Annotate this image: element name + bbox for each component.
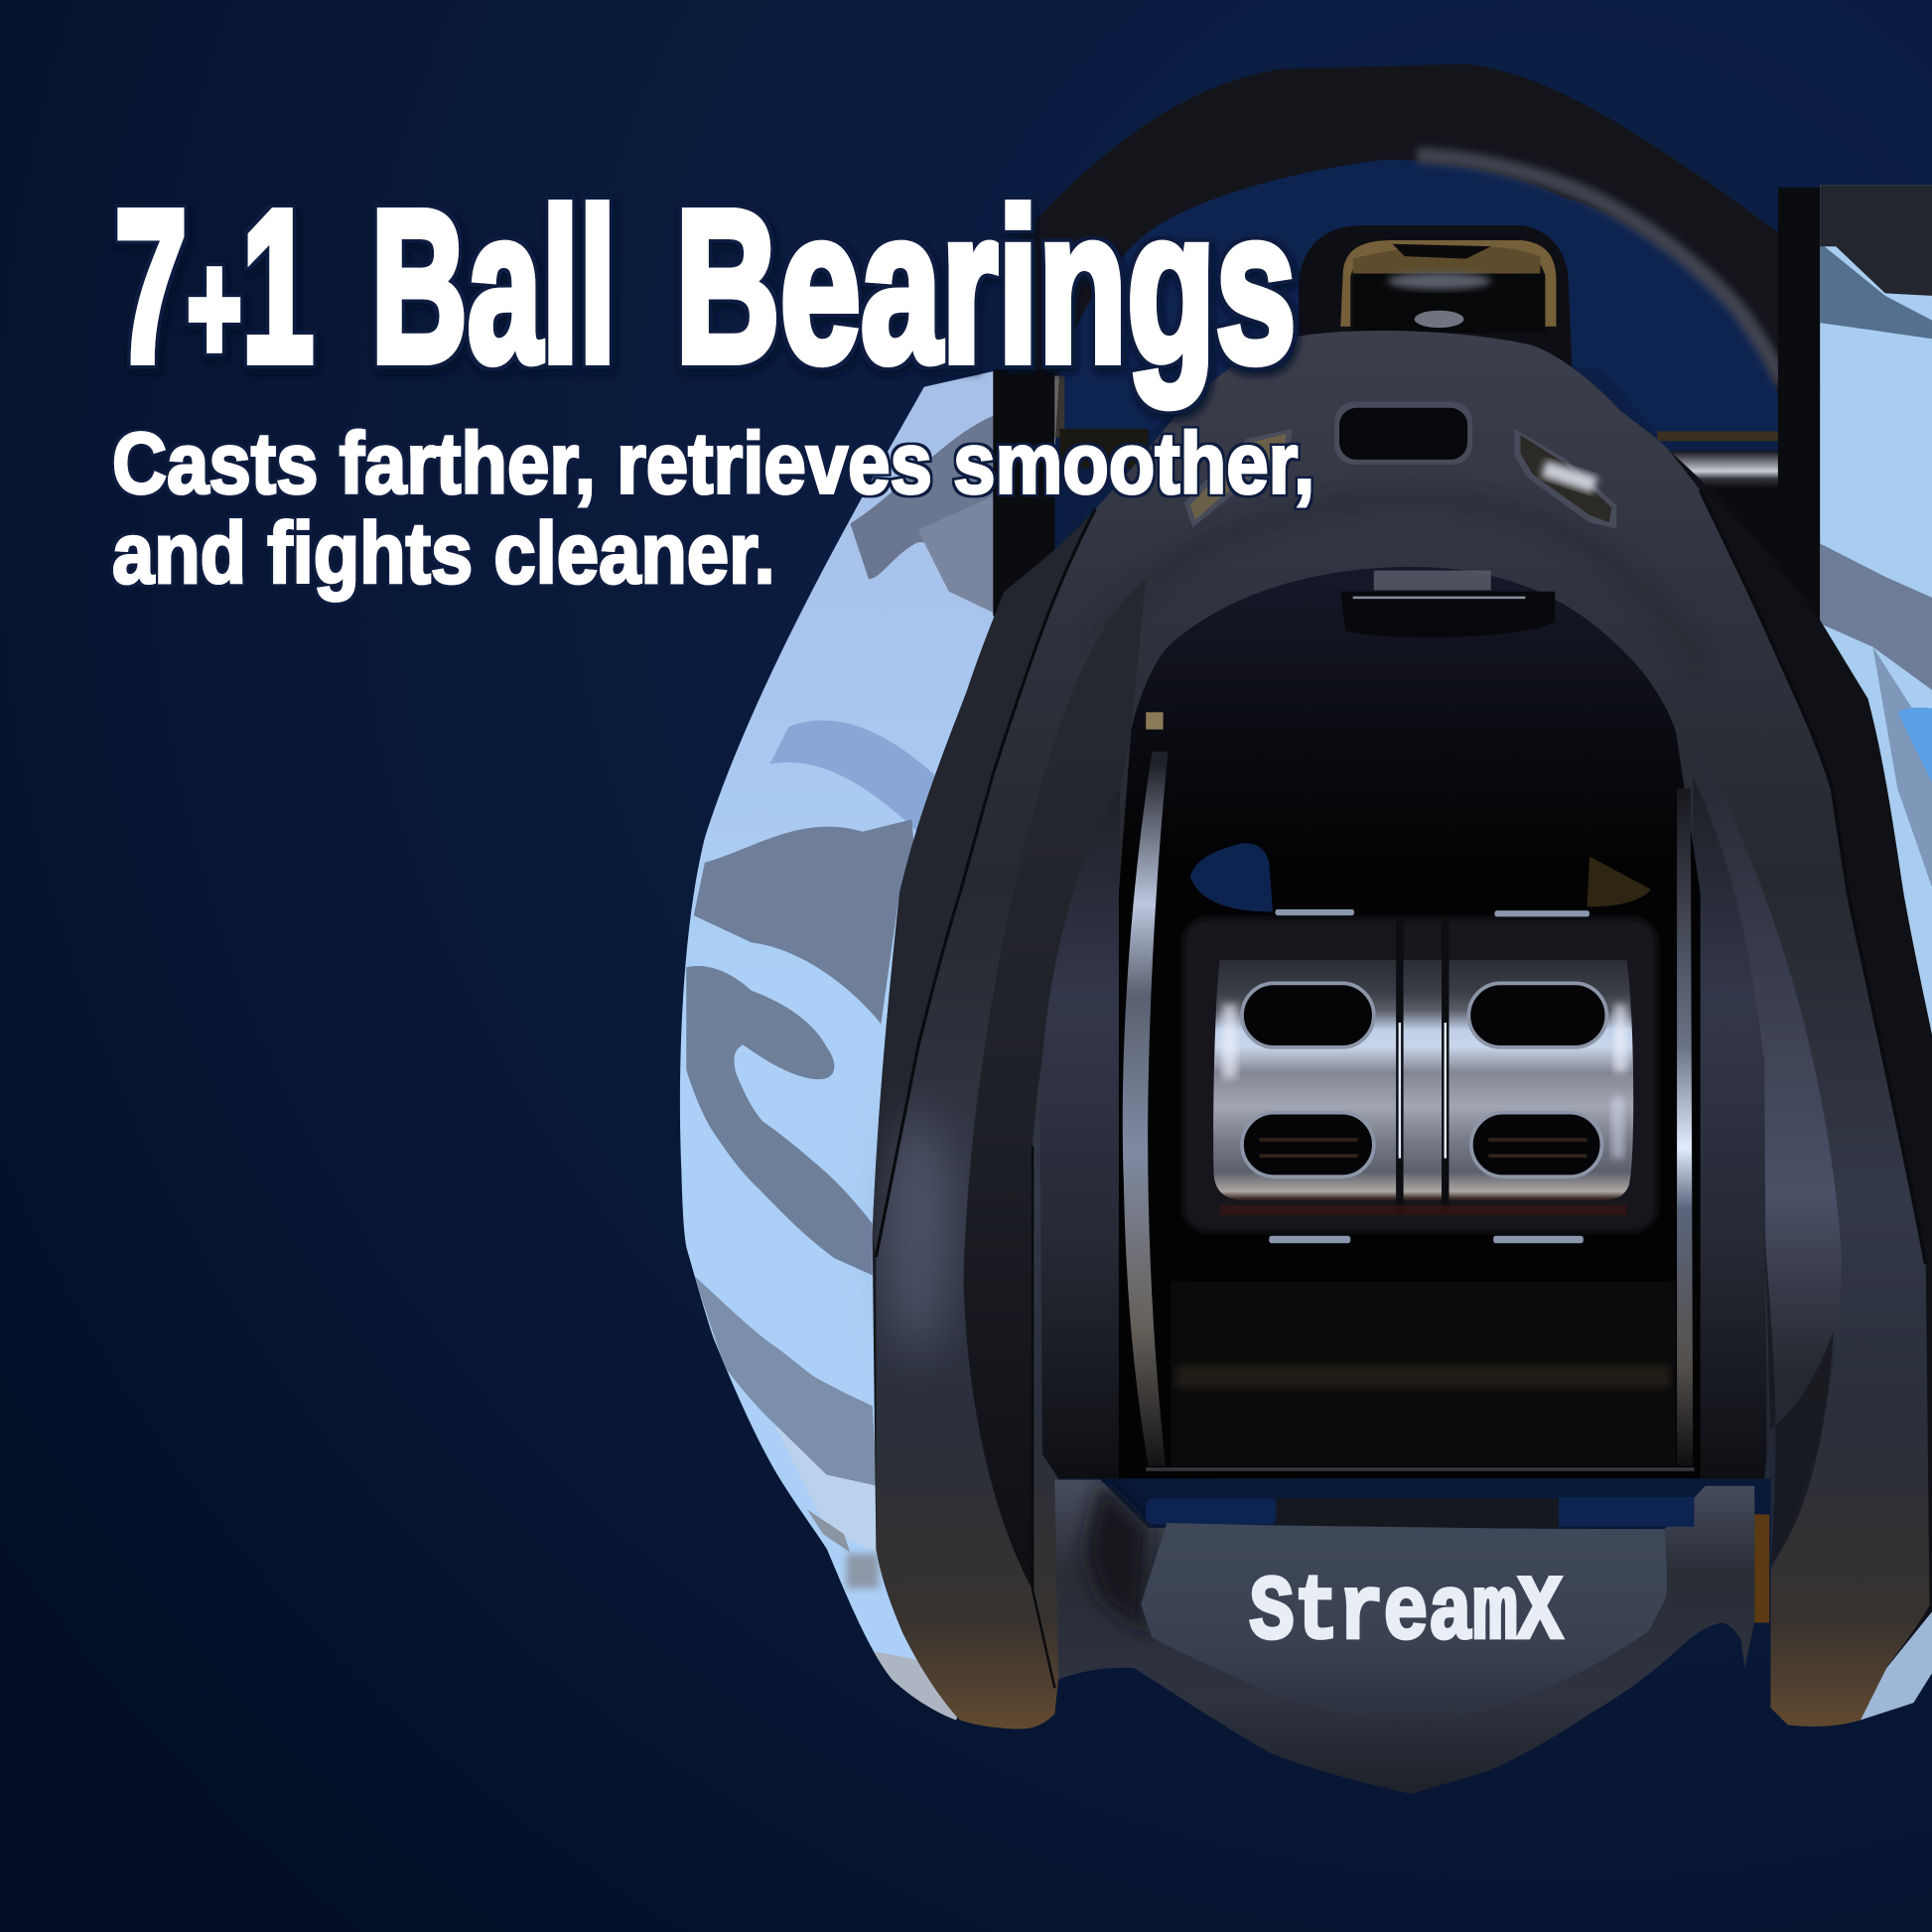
title: Ball: [371, 166, 617, 408]
left inner panel: [1039, 788, 1120, 1478]
body shell: [876, 331, 1930, 1729]
camo stripes, right plate: [1820, 185, 1932, 888]
right inner panel: [1693, 776, 1767, 1478]
icon: right spool flange: [1677, 788, 1693, 1466]
left outer panel highlight: [889, 1109, 947, 1355]
icon: right support post: [1778, 188, 1820, 628]
title: Bearings: [675, 166, 1297, 408]
grey logo plate: [1141, 1523, 1667, 1724]
right outer panel edge: [1693, 740, 1842, 1571]
frame shading near opening: [1095, 499, 1701, 665]
top windows of frame: [1184, 402, 1616, 528]
icon: polished spool cylinder: [1213, 918, 1633, 1213]
panel: base plate with logo: [1054, 1480, 1769, 1794]
text block: subtitle: [112, 415, 1314, 602]
panel: right camo side plate: [1820, 185, 1932, 1047]
icon: left support post: [993, 369, 1149, 617]
navy slots above plate: [1146, 1497, 1694, 1528]
icon: copper spacer: [1754, 1514, 1769, 1622]
panel: main reel frame: [873, 331, 1932, 1729]
seam lines: [876, 509, 1095, 1257]
slot reflections: [1259, 1140, 1587, 1156]
slots: [1242, 983, 1606, 1176]
icon: top knob: [1299, 225, 1574, 407]
title: [114, 166, 1297, 408]
text block: subtitle: Casts farther, retrieves smoother,: [112, 415, 1314, 511]
panel: left camo side plate: [665, 357, 1072, 1725]
icon: right horizontal axle: [1657, 431, 1778, 587]
icon: left spool flange: [1123, 752, 1169, 1466]
title: 7+1: [114, 166, 314, 408]
icon: lower inner tray: [1146, 1205, 1694, 1471]
icon: small highlight tabs: [1269, 909, 1589, 1243]
panel: right bottom camo corner: [1861, 1611, 1932, 1721]
text block: subtitle: and fights cleaner.: [112, 505, 775, 602]
camo stripes, left plate: [686, 413, 1001, 1721]
center band grooves: [1396, 918, 1449, 1213]
panel: frame opening interior: [1119, 567, 1701, 1478]
icon: background cutout holes: [1190, 843, 1651, 911]
background window behind handle: [1059, 160, 1778, 431]
left sliver outside seam: [873, 509, 1095, 1257]
logo: StreamX: StreamX: [1249, 1562, 1563, 1665]
left dark mid panel: [964, 579, 1146, 1589]
icon: handle arch: [1017, 65, 1820, 394]
black underlay: [873, 331, 1932, 1729]
